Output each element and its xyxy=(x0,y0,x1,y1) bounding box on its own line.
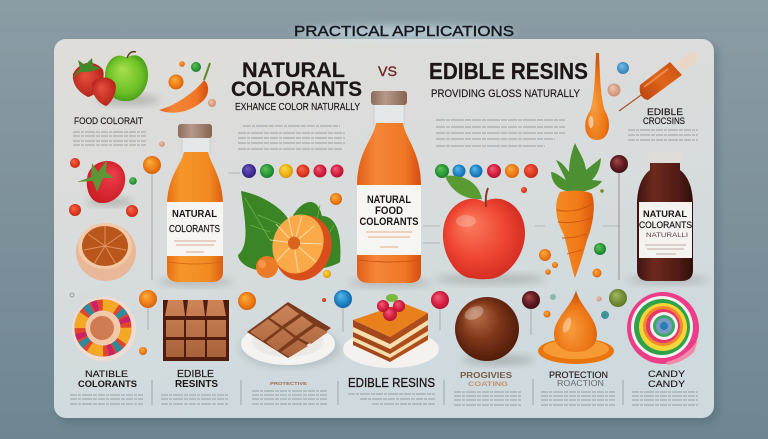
icon: chocolate on plate xyxy=(240,302,340,368)
heading: edible resins: PROVIDING GLOSS NATURALLY xyxy=(431,88,581,100)
text block: candy xyxy=(632,369,698,405)
row of colour dots: left xyxy=(228,164,344,205)
text block: food colorant xyxy=(73,116,146,145)
bottle label text xyxy=(360,194,418,247)
icon: citrus slice bowl xyxy=(76,223,136,281)
heading: natural colorants xyxy=(231,59,362,113)
panel: main card xyxy=(54,39,718,423)
text block: protective coating: COATING xyxy=(468,381,508,388)
icon: apple and strawberries xyxy=(72,52,160,106)
text block: chocolate description xyxy=(252,381,327,404)
decorative dots: top left xyxy=(168,61,216,107)
bottle label text: COLORANTS xyxy=(360,216,418,228)
row of colour dots: right xyxy=(423,164,620,243)
bottle label text: COLORANTS xyxy=(169,224,220,235)
decorative dots: caramel xyxy=(544,289,627,319)
icon: caramel drop xyxy=(538,290,614,364)
title: PRACTICAL APPLICATIONS xyxy=(294,23,514,40)
markers: wheel and chocolate xyxy=(70,290,157,355)
icon: tomato xyxy=(77,160,134,206)
icon: dark lollipop marker xyxy=(610,155,628,280)
icon: resin drop xyxy=(585,53,609,140)
bottle label text: COLORANTS xyxy=(639,220,692,231)
marker: red xyxy=(431,291,449,330)
icon: chocolate sphere xyxy=(455,297,534,365)
bottle: natural food colorants xyxy=(348,91,432,287)
icon: orange lollipop marker xyxy=(143,156,161,280)
icon: red apple xyxy=(435,176,545,284)
bottle label text: NATURAL xyxy=(172,208,218,220)
decorative dots: top right xyxy=(608,62,629,96)
text block: edible crocsins: EDIBLE xyxy=(647,107,683,117)
icon: layered cake on plate xyxy=(343,294,439,368)
bottle label text: NATURAL xyxy=(643,209,687,220)
text block: natural colorants description xyxy=(238,126,345,149)
icon: carrot xyxy=(551,143,602,278)
text block: edible resins lower: EDIBLE RESINS xyxy=(348,375,435,390)
icon: syringe xyxy=(619,51,698,111)
text block: protection reaction: PROTECTION xyxy=(549,370,608,380)
text block: food colorant: FOOD COLORAIT xyxy=(74,116,143,126)
text block: edible resints xyxy=(161,369,229,404)
text block: natible colorants: NATIBLE xyxy=(85,369,128,379)
icon: orange half with leaves xyxy=(238,191,341,289)
icon: rainbow lollipop xyxy=(627,292,699,365)
heading: natural colorants: COLORANTS xyxy=(231,78,362,101)
text block: candy: CANDY xyxy=(648,369,685,379)
decorative dots: carrot xyxy=(539,189,606,278)
marker: dark xyxy=(522,291,540,335)
text block: natible colorants: COLORANTS xyxy=(78,379,137,390)
text block: edible crocsins xyxy=(628,107,698,140)
text block: edible resints: EDIBLE xyxy=(177,369,214,380)
icon: chocolate grid xyxy=(163,300,229,361)
text block: edible crocsins: CROCSINS xyxy=(643,116,685,126)
text block: protection reaction xyxy=(541,370,615,405)
decorative dots: left xyxy=(69,141,165,217)
text block: natible colorants xyxy=(70,369,143,404)
text block: protective coating xyxy=(454,371,522,405)
bottle: natural colorants xyxy=(158,124,234,286)
label: vs: VS xyxy=(378,63,397,79)
heading: edible resins: EDIBLE RESINS xyxy=(429,58,588,84)
bottle label text: FOOD xyxy=(375,205,403,217)
heading: natural colorants: EXHANCE COLOR NATURALLY xyxy=(235,102,360,113)
text block: chocolate description: PROTECTIVE xyxy=(270,381,307,386)
markers: plate xyxy=(238,290,352,332)
text block: candy: CANDY xyxy=(648,379,685,389)
heading: edible resins xyxy=(429,58,588,100)
text block: edible resints: RESINTS xyxy=(175,379,218,390)
text block: protection reaction: ROACTION xyxy=(557,379,604,388)
icon: colour wheel xyxy=(72,297,136,361)
text block: protective coating: PROGIVIES xyxy=(460,371,513,380)
text block: edible resins description xyxy=(436,120,565,146)
bottle label text xyxy=(639,209,692,254)
bottle label text xyxy=(169,208,220,252)
bottle: dark natural colorants xyxy=(626,152,710,284)
text block: edible resins lower xyxy=(348,375,435,404)
bottle label text: NATURALLI xyxy=(646,232,688,239)
heading: natural colorants: NATURAL xyxy=(242,59,345,82)
bottle label text: NATURAL xyxy=(367,194,411,206)
icon: chili pepper xyxy=(159,63,210,113)
